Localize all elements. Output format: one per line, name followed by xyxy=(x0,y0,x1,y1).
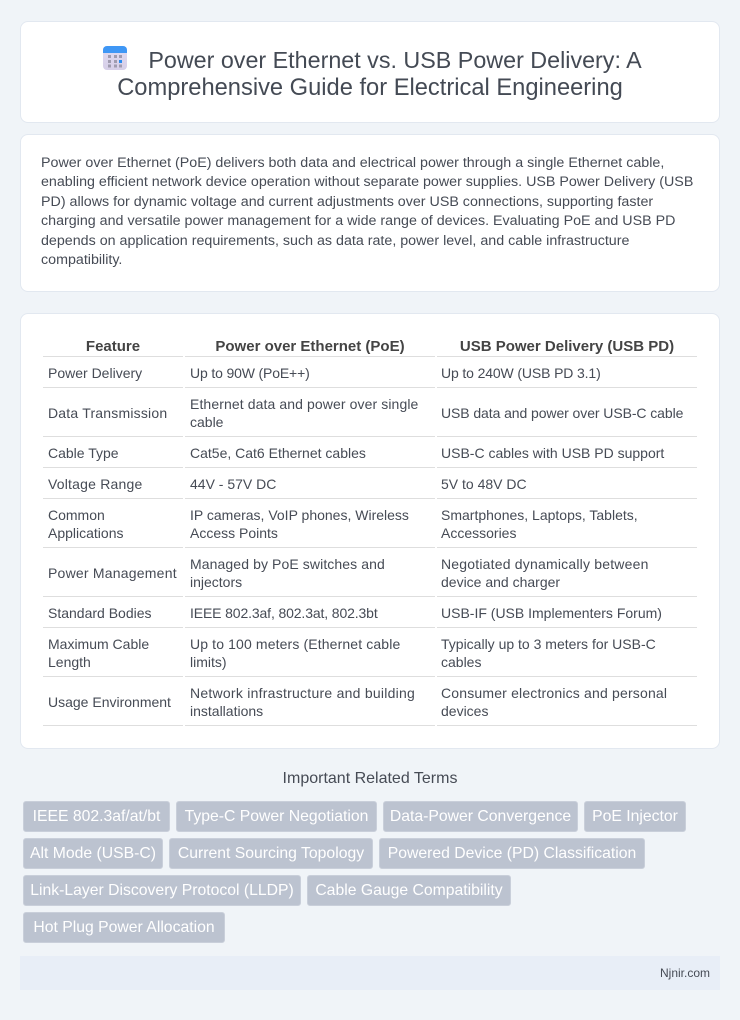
row: power delivery: Up to 240W (USB PD 3.1) xyxy=(441,365,601,381)
row: usage environment: devices xyxy=(441,703,488,719)
tag xyxy=(383,801,578,832)
row: usage environment: Usage Environment xyxy=(48,694,171,710)
title: Power over Ethernet vs. USB Power Delivery: A xyxy=(148,47,642,73)
row: maximum cable length: Length xyxy=(48,654,91,670)
row: data transmission xyxy=(48,396,683,430)
row: common applications: Access Points xyxy=(190,525,278,541)
text block: introduction: enabling efficient network device operation without separate power supplies. USB Power Delivery (USB xyxy=(41,174,693,190)
row: maximum cable length: Maximum Cable xyxy=(48,636,149,652)
row: common applications xyxy=(48,507,638,541)
tag xyxy=(176,801,377,832)
row: common applications: Smartphones, Laptops, Tablets, xyxy=(441,507,638,523)
heading: related terms: Important Related Terms xyxy=(283,770,457,787)
row: power management: Managed by PoE switches and xyxy=(190,556,385,572)
tag: Type-C Power Negotiation xyxy=(185,808,368,825)
row: voltage range: 5V to 48V DC xyxy=(441,476,527,492)
tag xyxy=(379,838,645,869)
footer xyxy=(20,956,720,990)
table header: Power over Ethernet (PoE) xyxy=(215,338,405,355)
row: maximum cable length: Typically up to 3 meters for USB-C xyxy=(441,636,656,652)
row: cable type: USB-C cables with USB PD support xyxy=(441,445,664,461)
tag: Powered Device (PD) Classification xyxy=(388,845,636,862)
row: data transmission: Ethernet data and power over single xyxy=(190,396,418,412)
table header xyxy=(86,338,674,355)
tag xyxy=(169,838,373,869)
row: usage environment: Consumer electronics and personal xyxy=(441,685,667,701)
tag xyxy=(584,801,686,832)
tag xyxy=(23,912,225,943)
row: power delivery: Up to 90W (PoE++) xyxy=(190,365,310,381)
row: common applications: Applications xyxy=(48,525,124,541)
row: data transmission: USB data and power over USB-C cable xyxy=(441,405,683,421)
row: voltage range xyxy=(48,476,527,492)
row: maximum cable length: Up to 100 meters (Ethernet cable xyxy=(190,636,400,652)
row: common applications: Common xyxy=(48,507,105,523)
row: standard bodies xyxy=(48,605,662,621)
tag: PoE Injector xyxy=(592,808,678,825)
row: cable type: Cable Type xyxy=(48,445,119,461)
row: voltage range: Voltage Range xyxy=(48,476,142,492)
text block: introduction: PD) allows for dynamic voltage and current adjustments over USB connections, supporting faster xyxy=(41,194,653,210)
tag: IEEE 802.3af/at/bt xyxy=(33,808,160,825)
row: standard bodies: Standard Bodies xyxy=(48,605,152,621)
row: voltage range: 44V - 57V DC xyxy=(190,476,276,492)
table header: Feature xyxy=(86,338,140,355)
tag: Link-Layer Discovery Protocol (LLDP) xyxy=(30,882,294,899)
row: power management: device and charger xyxy=(441,574,560,590)
row: common applications: IP cameras, VoIP phones, Wireless xyxy=(190,507,409,523)
row: standard bodies: IEEE 802.3af, 802.3at, 802.3bt xyxy=(190,605,378,621)
panel: comparison table xyxy=(20,313,720,749)
tag: Alt Mode (USB-C) xyxy=(30,845,156,862)
text block: introduction: compatibility. xyxy=(41,252,122,268)
row: cable type: Cat5e, Cat6 Ethernet cables xyxy=(190,445,366,461)
panel: introduction xyxy=(20,134,720,292)
row: usage environment xyxy=(48,685,667,719)
tag xyxy=(307,875,511,906)
tag xyxy=(23,838,163,869)
tag xyxy=(23,875,301,906)
title xyxy=(117,47,642,101)
row: standard bodies: USB-IF (USB Implementers Forum) xyxy=(441,605,662,621)
row: power delivery: Power Delivery xyxy=(48,365,142,381)
row: usage environment: Network infrastructure and building xyxy=(190,685,415,701)
text block: introduction xyxy=(41,155,693,268)
table header: USB Power Delivery (USB PD) xyxy=(460,338,674,355)
text block: introduction: charging and versatile power management for a wide range of devices. Evaluating PoE and USB PD xyxy=(41,213,675,229)
text block: introduction: Power over Ethernet (PoE) delivers both data and electrical power through a single Ethernet cable, xyxy=(41,155,664,171)
tag: Cable Gauge Compatibility xyxy=(315,882,503,899)
row: power management xyxy=(48,556,649,590)
icon: calendar grid xyxy=(103,46,127,70)
row: power management: Negotiated dynamically between xyxy=(441,556,649,572)
row: power delivery xyxy=(48,365,601,381)
tag: Current Sourcing Topology xyxy=(178,845,364,862)
related term tags xyxy=(23,801,686,943)
footer credit: Njnir.com xyxy=(660,966,710,980)
row: maximum cable length xyxy=(48,636,656,670)
row: cable type xyxy=(48,445,664,461)
tag: Data-Power Convergence xyxy=(390,808,571,825)
title: Comprehensive Guide for Electrical Engineering xyxy=(117,75,623,101)
row: maximum cable length: cables xyxy=(441,654,481,670)
tag xyxy=(23,801,170,832)
row: data transmission: Data Transmission xyxy=(48,405,167,421)
row: common applications: Accessories xyxy=(441,525,516,541)
panel: header xyxy=(20,21,720,123)
row: maximum cable length: limits) xyxy=(190,654,227,670)
row: power management: Power Management xyxy=(48,565,177,581)
comparison table xyxy=(43,338,697,726)
row: power management: injectors xyxy=(190,574,242,590)
text block: introduction: depends on application requirements, such as data rate, power level, and cable infrastructure xyxy=(41,233,629,249)
tag: Hot Plug Power Allocation xyxy=(33,919,215,936)
row: usage environment: installations xyxy=(190,703,263,719)
row: data transmission: cable xyxy=(190,414,223,430)
